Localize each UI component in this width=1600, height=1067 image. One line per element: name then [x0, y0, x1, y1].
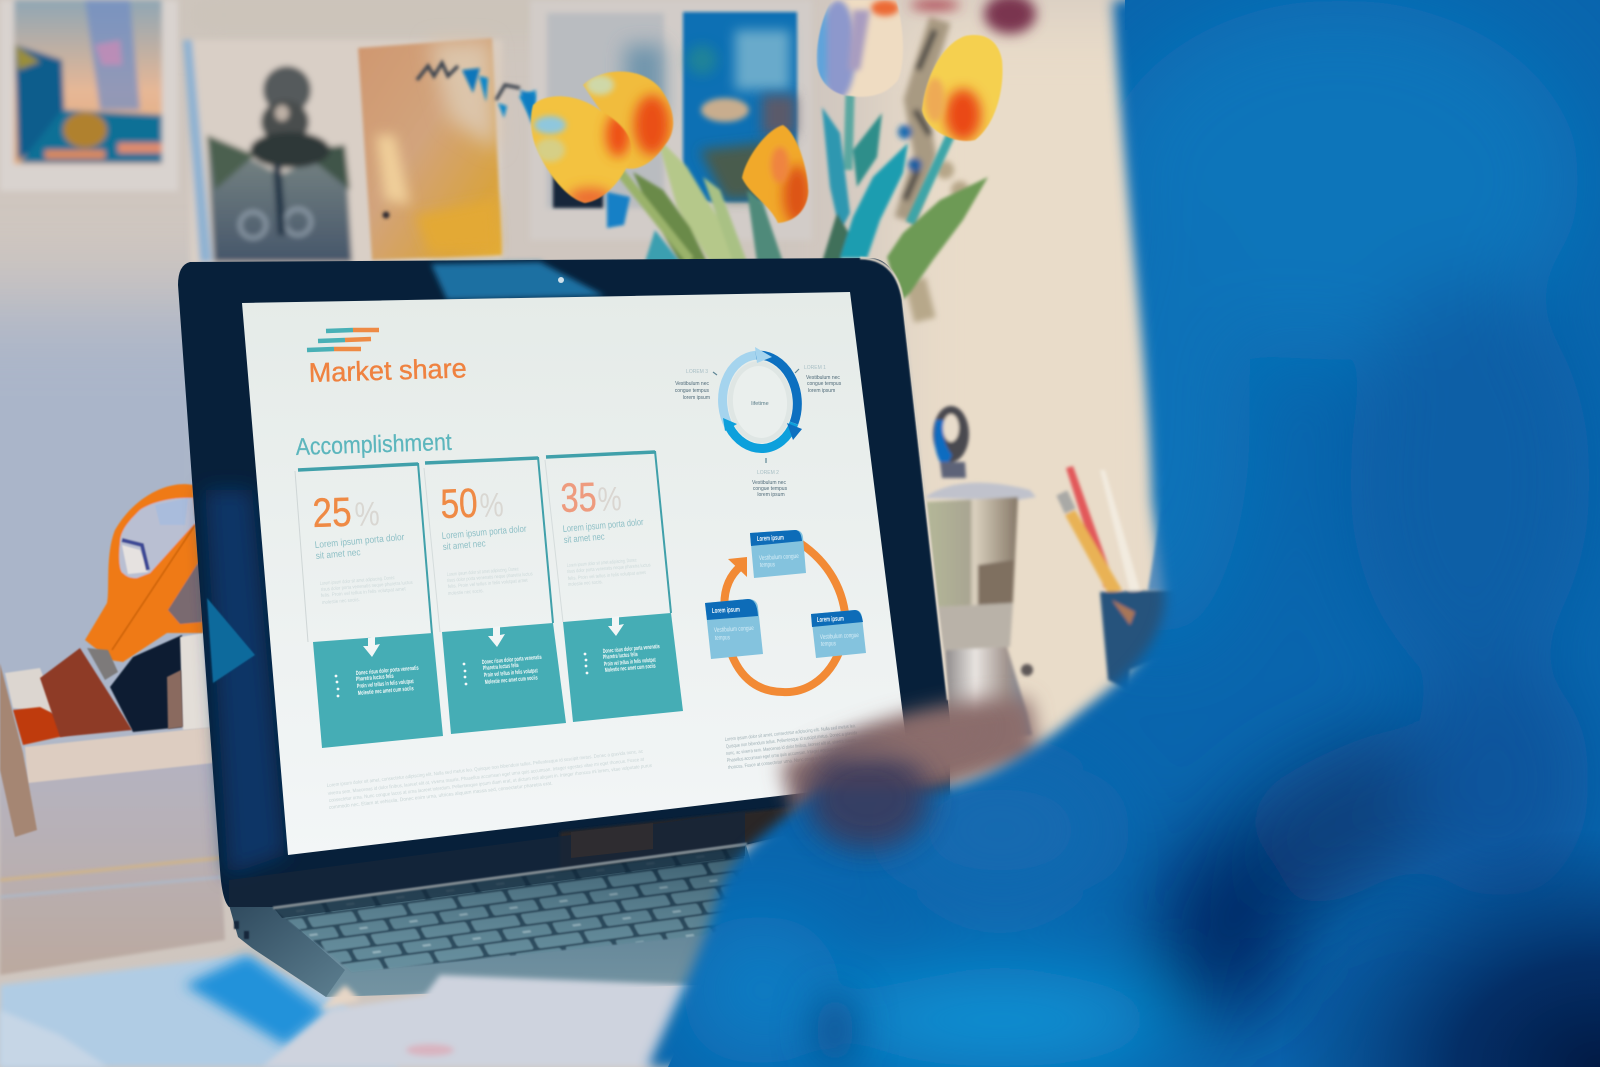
- laptop lid: [178, 258, 950, 908]
- percent sign: %: [479, 486, 504, 525]
- box left: [705, 599, 763, 659]
- footnote text: viverra sem. Maecenas id dolor finibus, laoreet elit at, viverra mauris. Phasellus accumsan eget urna quis accumsan. Integer egestas vitae mi eget rhoncus. Fusce at: [328, 757, 645, 797]
- lower right text: Quisque non bibendum tellus. Pellentesque id suscipit metus. Donec a gravida: [726, 730, 858, 750]
- percent value: 35: [560, 474, 597, 521]
- label bottom: congue tempus: [753, 486, 788, 492]
- screen background: [242, 292, 911, 855]
- scissors screw: [87, 648, 118, 680]
- body text: Lorem ipsum dolor sit amet adipiscing. Donec: [567, 557, 637, 569]
- percent value: 25: [312, 489, 352, 536]
- brown roll: [40, 648, 132, 737]
- label right: LOREM 1: [804, 365, 826, 371]
- organiser back: [5, 668, 57, 713]
- body text: risus dolor porta venenatis neque pharetra luctus: [447, 571, 533, 584]
- bullet list: [463, 655, 542, 686]
- body text: Lorem ipsum dolor sit amet adipiscing. Donec: [447, 566, 519, 578]
- box right: Lorem ipsum: [817, 616, 844, 624]
- lid bezel: [178, 258, 950, 907]
- wood clip: [0, 663, 37, 837]
- body text: Lorem ipsum dolor sit amet adipiscing. Donec: [320, 575, 395, 587]
- print: ferris wheel: [0, 0, 178, 191]
- tulip: yellow orange behind: [582, 70, 674, 170]
- label bottom: Vestibulum nec: [752, 480, 786, 486]
- body text: felis. Proin vel tellus in felis volutpat amet: [448, 578, 528, 590]
- ring arrow head: [728, 557, 747, 577]
- percent value: 50: [440, 480, 478, 527]
- subtitle: sit amet nec: [563, 531, 605, 546]
- box right: tempus: [821, 640, 837, 648]
- top purple red blurred object: [910, 0, 1036, 34]
- lower wall and desk band: [0, 750, 400, 1067]
- subtitle: Lorem ipsum porta dolor: [562, 517, 644, 535]
- panel: card 35 percent: [545, 451, 683, 722]
- panel: card 50 percent: [424, 457, 566, 734]
- panel: card 25 percent: [295, 463, 443, 748]
- inner disc: [725, 358, 795, 446]
- twine rope: [898, 20, 969, 320]
- keyboard: [273, 846, 745, 972]
- left bezel tint: [205, 490, 285, 875]
- tulip: orange centre: [741, 124, 810, 224]
- footnote text: commodo nec. Etiam at vehicula. Donec enim urna, ultrices aliquam massa sed, consectetur pharetra erat.: [329, 781, 553, 811]
- subtitle: Lorem ipsum porta dolor: [314, 532, 405, 551]
- label right: Vestibulum nec: [806, 375, 840, 381]
- tulip stems and leaves: [520, 90, 988, 302]
- red bowl: [13, 707, 77, 745]
- subtitle: Lorem ipsum porta dolor: [441, 524, 527, 542]
- box left: Lorem ipsum: [712, 607, 740, 615]
- bullet list: Molestie nec amet cum sociis: [605, 664, 656, 674]
- body text: risus dolor porta venenatis neque pharetra luctus: [321, 580, 413, 593]
- silver edge: [860, 258, 948, 700]
- bullet list: Pharetra luctus felis: [603, 652, 638, 661]
- pencils and mesh cup: [1056, 466, 1180, 690]
- brown strip: [167, 670, 183, 729]
- lower right text: rhoncus. Fusce at consectetur urna. Nunc congue lacus at urna laoreet.: [728, 751, 857, 771]
- footnote text: consectetur urna. Nunc congue lacus at urna laoreet interdum. Pellentesque ipsum diam erat, ut dictum nisl aliquet in. Integer rhoncus mi lorem, vitae vulputate purus: [329, 763, 653, 804]
- subtitle: [562, 517, 644, 546]
- subtitle: [441, 524, 527, 553]
- bullet list: Pharetra luctus felis: [483, 663, 519, 672]
- bullet list: Donec risus dolor porta venenatis: [356, 665, 419, 677]
- blue shirt in foreground: [641, 0, 1600, 1067]
- body text: molestie nec sociis.: [448, 588, 484, 597]
- centre label: lifetime: [751, 401, 769, 407]
- blurred photo prints on the wall: [0, 0, 812, 265]
- body text: risus dolor porta venenatis neque pharetra luctus: [567, 562, 651, 575]
- title: Market share: [308, 353, 467, 388]
- footnote text: Lorem ipsum dolor sit amet, consectetur adipiscing elit. Nulla sed metus leo. Quisque non bibendum tellus. Pellentesque id suscipit metus. Donec a gravida nunc, ac: [327, 749, 644, 789]
- label left: lorem ipsum: [683, 395, 710, 401]
- bullet list: Molestie nec amet cum sociis: [358, 686, 414, 697]
- tulip: pale lilac: [816, 0, 903, 98]
- bullet list: Molestie nec amet cum sociis: [485, 675, 538, 686]
- bullet list: [335, 665, 419, 697]
- label right: [804, 365, 842, 394]
- label bottom: LOREM 2: [757, 470, 779, 476]
- arrow heads: [755, 347, 772, 363]
- bottom bezel brown: [560, 790, 950, 870]
- laptop base and keyboard: [229, 842, 780, 997]
- label left: congue tempus: [675, 388, 709, 394]
- teal box: [563, 613, 683, 722]
- logo bars: [307, 330, 379, 350]
- bullet list: [584, 644, 660, 674]
- bullet list: Proin vel tellus in felis volutpat: [357, 679, 414, 690]
- box top: [750, 530, 806, 578]
- bullet list: Donec risus dolor porta venenatis: [603, 644, 660, 655]
- print: blue painting: [683, 12, 797, 202]
- box top: tempus: [760, 561, 776, 569]
- bullet list: Donec risus dolor porta venenatis: [482, 655, 542, 666]
- box left: Vestibulum congue: [714, 625, 754, 634]
- camera: [558, 277, 564, 283]
- arrow: [608, 616, 624, 636]
- arcs: [719, 352, 801, 452]
- teal box: [442, 623, 566, 734]
- label bottom: [752, 470, 788, 498]
- paper on desk: [0, 975, 690, 1067]
- inner white: [730, 364, 790, 440]
- dark disc: [110, 635, 182, 732]
- organiser post: [180, 633, 210, 730]
- print: bicycle on road: [183, 40, 502, 265]
- base: [232, 842, 780, 997]
- arrow: [488, 626, 505, 647]
- moka pot: [924, 406, 1036, 745]
- tulip: yellow orange front: [530, 95, 632, 204]
- label right: congue tempus: [807, 381, 842, 387]
- body text: molestie nec sociis.: [322, 597, 360, 606]
- base left side: [229, 905, 345, 997]
- orange cycle diagram: [705, 530, 866, 692]
- lifecycle ring chart: [675, 347, 842, 498]
- footnote text: [327, 749, 653, 811]
- label right: lorem ipsum: [808, 388, 835, 394]
- scissors: [85, 484, 203, 662]
- print: orange abstract: [358, 38, 502, 260]
- heading: Accomplishment: [295, 429, 452, 461]
- subtitle: sit amet nec: [442, 538, 486, 553]
- label bottom: lorem ipsum: [757, 492, 785, 498]
- hinge line: [273, 844, 747, 908]
- label left: [675, 369, 710, 401]
- body text: [447, 566, 533, 597]
- garland flags: [417, 63, 536, 123]
- lower right text: Phasellus accumsan eget urna quis accumsan. Integer egestas vitae mi eget: [727, 744, 857, 764]
- lower right text: [725, 723, 858, 771]
- bullet list: Pharetra luctus felis: [356, 674, 394, 683]
- scissors and desk organiser: [0, 484, 213, 837]
- subtitle: sit amet nec: [315, 547, 361, 562]
- percent sign: %: [354, 495, 380, 534]
- teal box: [313, 633, 443, 748]
- box right: [811, 610, 866, 658]
- body text: [320, 575, 413, 606]
- bullet list: Proin vel tellus in felis volutpat: [604, 657, 656, 668]
- tulip: yellow right: [921, 34, 1004, 142]
- hand rim behind shirt: [780, 698, 1040, 830]
- left glare: [207, 598, 255, 683]
- laptop screen slide: [242, 292, 911, 855]
- organiser front: [25, 727, 213, 783]
- box right: Vestibulum congue: [820, 632, 859, 641]
- percent sign: %: [597, 480, 622, 519]
- bullet list: Proin vel tellus in felis volutpat: [484, 668, 538, 679]
- subtitle: [314, 532, 405, 562]
- orange ring: [724, 543, 846, 692]
- top glare: [431, 262, 605, 300]
- body text: [567, 557, 651, 588]
- body text: felis. Proin vel tellus in felis volutpat amet: [568, 570, 646, 582]
- hand in front of shirt edge: [806, 722, 990, 850]
- lower right text: Lorem ipsum dolor sit amet, consectetur adipiscing elit. Nulla sed metus leo.: [725, 723, 856, 743]
- print: grey blue: [530, 0, 812, 240]
- box left: tempus: [715, 634, 731, 642]
- label left: LOREM 3: [686, 369, 708, 375]
- box top: Vestibulum congue: [759, 553, 799, 562]
- body text: felis. Proin vel tellus in felis volutpat amet: [321, 586, 406, 599]
- body text: molestie nec sociis.: [568, 579, 603, 588]
- function row: [272, 846, 745, 918]
- label left: Vestibulum nec: [675, 381, 709, 387]
- arrow: [363, 637, 380, 657]
- box top: Lorem ipsum: [757, 535, 784, 543]
- lower right text: nunc, ac viverra sem. Maecenas id dolor finibus, laoreet elit at, viverra mauris.: [726, 737, 857, 757]
